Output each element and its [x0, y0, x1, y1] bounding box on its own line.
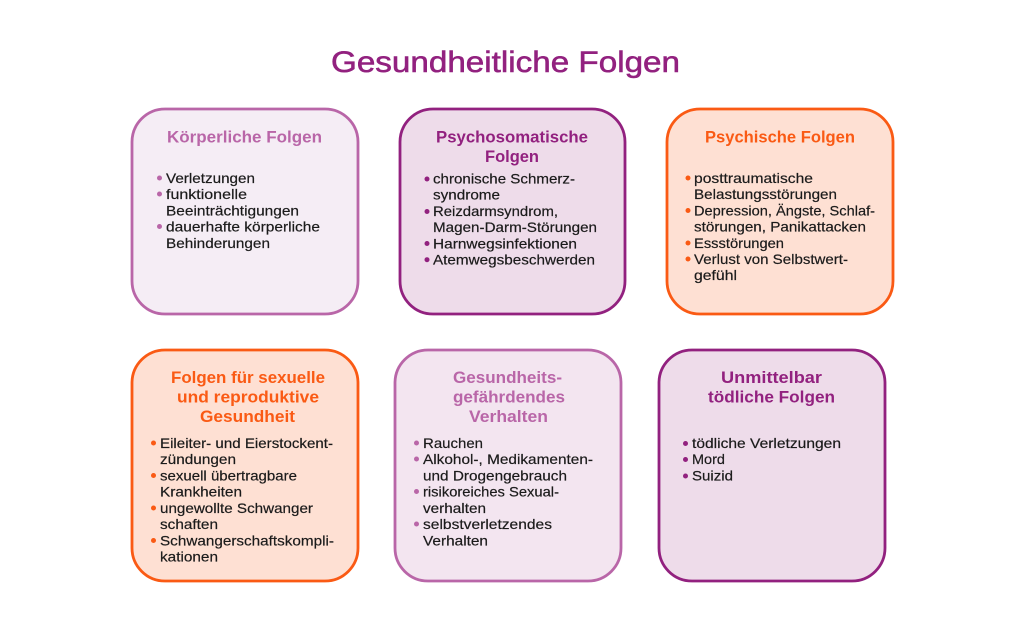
list: gesundheitsgefährdendes Verhalten: verhalten — [423, 500, 486, 516]
list: sexuelle und reproduktive Gesundheit: zündungen — [160, 451, 236, 467]
heading: Unmittelbar tödliche Folgen: Unmittelbar — [721, 368, 822, 387]
list: unmittelbar tödliche Folgen: Mord — [692, 451, 725, 467]
heading: Psychosomatische Folgen: Psychosomatische — [436, 127, 588, 146]
list: gesundheitsgefährdendes Verhalten: und Drogengebrauch — [423, 467, 567, 483]
list: gesundheitsgefährdendes Verhalten: Verhalten — [423, 532, 488, 548]
title: Gesundheitliche Folgen — [331, 46, 680, 79]
list: unmittelbar tödliche Folgen: tödliche Verletzungen — [692, 435, 841, 451]
heading: Psychosomatische Folgen: Folgen — [485, 147, 539, 166]
list: sexuelle und reproduktive Gesundheit: Eileiter- und Eierstockent- — [160, 435, 333, 451]
heading: Unmittelbar tödliche Folgen: tödliche Folgen — [708, 387, 835, 406]
list: psychosomatische Folgen: Magen-Darm-Störungen — [433, 219, 597, 235]
list: psychosomatische Folgen: Harnwegsinfektionen — [433, 235, 577, 251]
heading: Folgen für sexuelle und reproduktive Gesundheit — [171, 368, 325, 426]
heading: Gesundheitsgefährdendes Verhalten: Gesundheits- — [453, 368, 562, 387]
list: sexuelle und reproduktive Gesundheit: schaften — [160, 516, 218, 532]
list: körperliche Folgen: Behinderungen — [166, 235, 270, 251]
heading: Gesundheitsgefährdendes Verhalten: gefährdendes — [453, 387, 565, 406]
heading: Gesundheitsgefährdendes Verhalten: Verhalten — [469, 407, 548, 426]
list: psychische Folgen: posttraumatische — [694, 170, 813, 186]
list: psychosomatische Folgen: chronische Schmerz- — [433, 170, 575, 186]
list: körperliche Folgen: funktionelle — [166, 186, 247, 202]
list: psychosomatische Folgen: Atemwegsbeschwerden — [433, 252, 595, 268]
list: psychosomatische Folgen: syndrome — [433, 187, 500, 203]
list: gesundheitsgefährdendes Verhalten — [414, 435, 593, 548]
list: psychische Folgen — [686, 170, 875, 283]
list: psychische Folgen: Belastungsstörungen — [694, 186, 837, 202]
heading: Gesundheitsgefährdendes Verhalten — [453, 368, 565, 426]
panel: Folgen für sexuelle und reproduktive Gesundheit — [132, 350, 358, 581]
list: unmittelbar tödliche Folgen: Suizid — [692, 467, 733, 483]
heading: Folgen für sexuelle und reproduktive Gesundheit: Folgen für sexuelle — [171, 368, 325, 387]
list: körperliche Folgen: Verletzungen — [166, 170, 255, 186]
list: körperliche Folgen — [157, 170, 320, 251]
list: gesundheitsgefährdendes Verhalten: Rauchen — [423, 435, 483, 451]
list: sexuelle und reproduktive Gesundheit: Krankheiten — [160, 484, 242, 500]
list: sexuelle und reproduktive Gesundheit: kationen — [160, 548, 218, 564]
heading: Folgen für sexuelle und reproduktive Gesundheit: und reproduktive — [177, 387, 319, 406]
list: körperliche Folgen: Beeinträchtigungen — [166, 202, 299, 218]
list: gesundheitsgefährdendes Verhalten: risikoreiches Sexual- — [423, 484, 559, 500]
list: psychosomatische Folgen — [424, 170, 597, 268]
list: sexuelle und reproduktive Gesundheit: sexuell übertragbare — [160, 467, 297, 483]
list: körperliche Folgen: dauerhafte körperliche — [166, 218, 320, 234]
panel: Körperliche Folgen — [132, 109, 358, 314]
heading: Psychische Folgen: Psychische Folgen — [705, 127, 855, 146]
list: sexuelle und reproduktive Gesundheit: Schwangerschaftskompli- — [160, 532, 334, 548]
list: psychische Folgen: gefühl — [694, 267, 737, 283]
list: sexuelle und reproduktive Gesundheit — [151, 435, 334, 564]
panel: Psychische Folgen — [667, 109, 893, 314]
panel: Gesundheitsgefährdendes Verhalten — [395, 350, 621, 581]
list: gesundheitsgefährdendes Verhalten: selbstverletzendes — [423, 516, 552, 532]
heading: Folgen für sexuelle und reproduktive Gesundheit: Gesundheit — [200, 407, 295, 426]
heading: Körperliche Folgen: Körperliche Folgen — [167, 127, 322, 146]
heading: Psychosomatische Folgen — [436, 127, 588, 166]
list: psychische Folgen: störungen, Panikattacken — [694, 218, 866, 234]
list: unmittelbar tödliche Folgen — [683, 435, 841, 483]
list: psychische Folgen: Verlust von Selbstwert- — [694, 251, 848, 267]
list: psychische Folgen: Essstörungen — [694, 235, 784, 251]
panel: Psychosomatische Folgen — [400, 109, 625, 314]
list: gesundheitsgefährdendes Verhalten: Alkohol-, Medikamenten- — [423, 451, 593, 467]
list: psychische Folgen: Depression, Ängste, Schlaf- — [694, 202, 875, 218]
list: psychosomatische Folgen: Reizdarmsyndrom, — [433, 203, 558, 219]
list: sexuelle und reproduktive Gesundheit: ungewollte Schwanger — [160, 500, 313, 516]
heading: Unmittelbar tödliche Folgen — [708, 368, 835, 406]
panel: Unmittelbar tödliche Folgen — [659, 350, 885, 581]
